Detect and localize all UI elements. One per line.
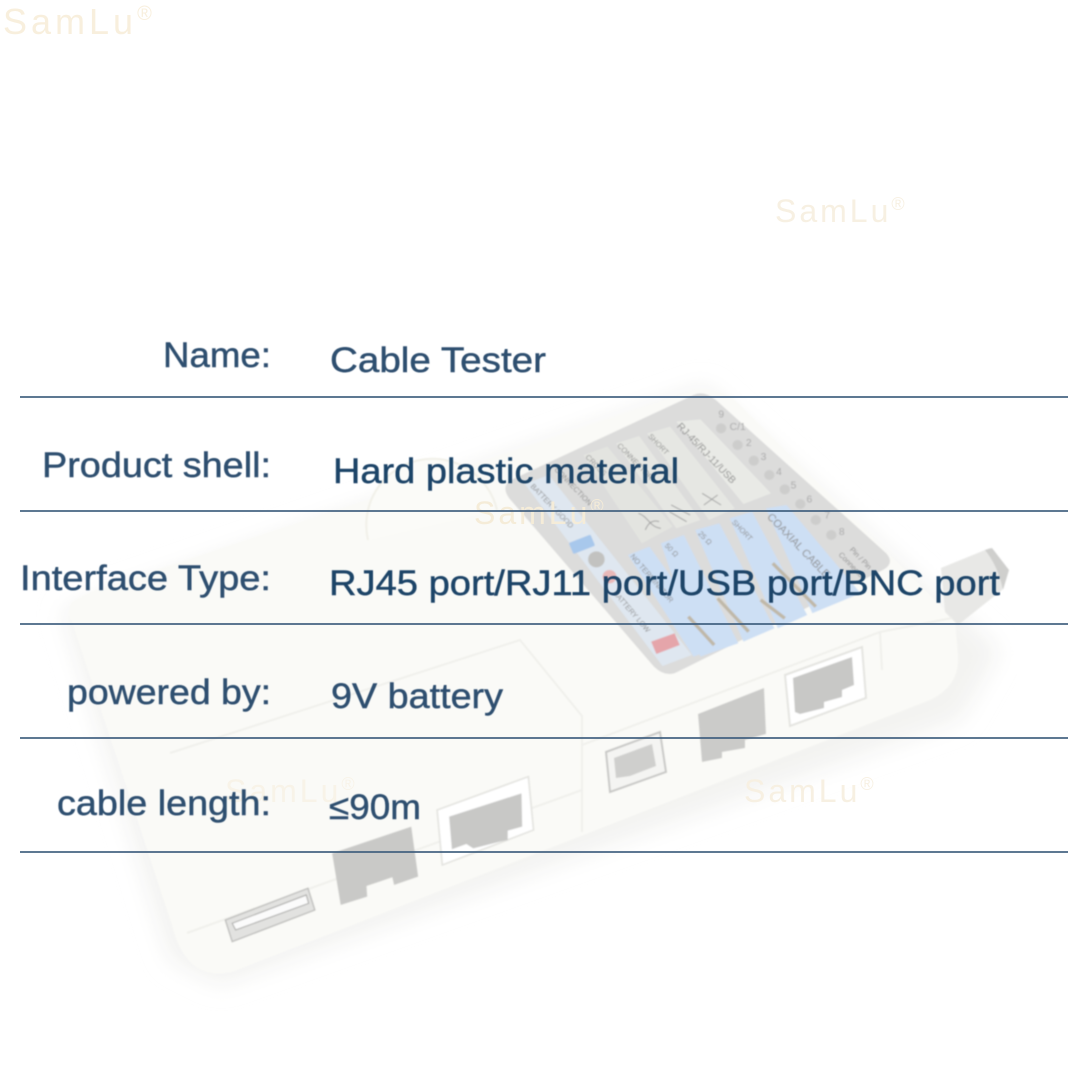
panel labels: CONNECTOR xyxy=(615,441,655,482)
watermark lower left: SamLu xyxy=(225,773,341,809)
LED pin numbers xyxy=(718,409,845,538)
LED pin numbers: 9 xyxy=(718,409,724,420)
panel labels: COAXIAL CABLE xyxy=(764,511,832,581)
watermark upper right: ® xyxy=(891,194,908,214)
watermark lower right: ® xyxy=(860,774,877,794)
panel labels: RJ-45/RJ-11/USB xyxy=(674,421,738,486)
port: USB-B xyxy=(606,732,666,792)
row: cable length: cable length: xyxy=(57,784,271,823)
watermark lower left: ® xyxy=(341,774,358,794)
watermark top left: ® xyxy=(137,3,156,25)
row: name xyxy=(163,336,546,380)
LED pin numbers: C/1 xyxy=(730,422,746,433)
watermark centre: SamLu xyxy=(474,495,590,531)
panel labels: 25 Ω xyxy=(696,529,714,547)
row: interface type xyxy=(20,559,1000,603)
row: product shell: Product shell: xyxy=(42,446,271,485)
panel labels: SHORT xyxy=(646,432,671,457)
row: product shell xyxy=(42,446,679,491)
panel labels: 50 Ω xyxy=(663,541,681,559)
row: powered by xyxy=(67,673,504,716)
panel: RJ-45 section xyxy=(676,419,771,504)
round dial recess xyxy=(366,459,497,540)
LED pin numbers: 2 xyxy=(746,438,752,449)
port: RJ11 right xyxy=(698,688,766,762)
BNC connector xyxy=(941,548,1009,625)
device body xyxy=(69,389,958,973)
LED pin numbers: 8 xyxy=(839,527,845,538)
LED pin numbers: 3 xyxy=(761,452,767,463)
icon: battery low xyxy=(651,633,680,654)
specification rows xyxy=(20,336,1000,827)
LED pin numbers: 6 xyxy=(806,495,813,506)
wiring glyphs xyxy=(638,493,721,530)
device shadow xyxy=(62,385,1000,985)
row: interface type: RJ45 port/RJ11 port/USB port/BNC port xyxy=(329,564,1000,603)
port: RJ45 right xyxy=(785,647,866,726)
watermarks xyxy=(3,1,908,809)
watermark upper right: SamLu xyxy=(775,193,891,229)
watermark lower right: SamLu xyxy=(744,773,860,809)
coax glyphs xyxy=(688,563,816,645)
panel: battery strip xyxy=(525,475,692,666)
watermark centre: ® xyxy=(590,496,607,516)
row: powered by: powered by: xyxy=(67,673,271,712)
row: product shell: Hard plastic material xyxy=(333,452,679,491)
row: cable length xyxy=(57,784,421,827)
port: RJ45 left xyxy=(437,777,534,865)
panel labels: SHORT xyxy=(730,518,755,543)
LEDs xyxy=(716,423,836,540)
row: name: Cable Tester xyxy=(330,341,546,380)
panel labels: BATTERY LOW xyxy=(611,589,652,634)
row: interface type: Interface Type: xyxy=(20,559,271,598)
icon: status lamp xyxy=(588,551,605,567)
LED pin numbers: 5 xyxy=(791,480,797,491)
divider lines xyxy=(20,397,1068,852)
panel labels: CROSS xyxy=(584,453,609,478)
panel labels: NO TERMINATOR xyxy=(628,552,676,605)
row: powered by: 9V battery xyxy=(331,677,504,716)
panel labels: BATTERY GOOD xyxy=(528,482,576,530)
port: USB-A xyxy=(225,888,315,942)
seams on the housing xyxy=(170,618,952,933)
port: RJ11 left xyxy=(332,827,418,905)
row: name: Name: xyxy=(163,336,271,375)
panel labels: CONNECTION xyxy=(553,465,594,507)
LED pin numbers: 4 xyxy=(776,467,782,478)
product photo: faded cable tester xyxy=(62,385,1009,985)
watermark top left: SamLu xyxy=(3,1,137,42)
panel labels xyxy=(528,421,874,634)
LCD panel xyxy=(505,393,890,674)
LED pin numbers: 7 xyxy=(824,510,830,521)
panel: blue coaxial section xyxy=(766,505,861,613)
row: cable length: ≤90m xyxy=(329,788,421,827)
panel labels: Connector xyxy=(837,550,868,581)
panel labels: Pin / Pin xyxy=(848,545,874,571)
icon: battery good xyxy=(569,535,595,554)
